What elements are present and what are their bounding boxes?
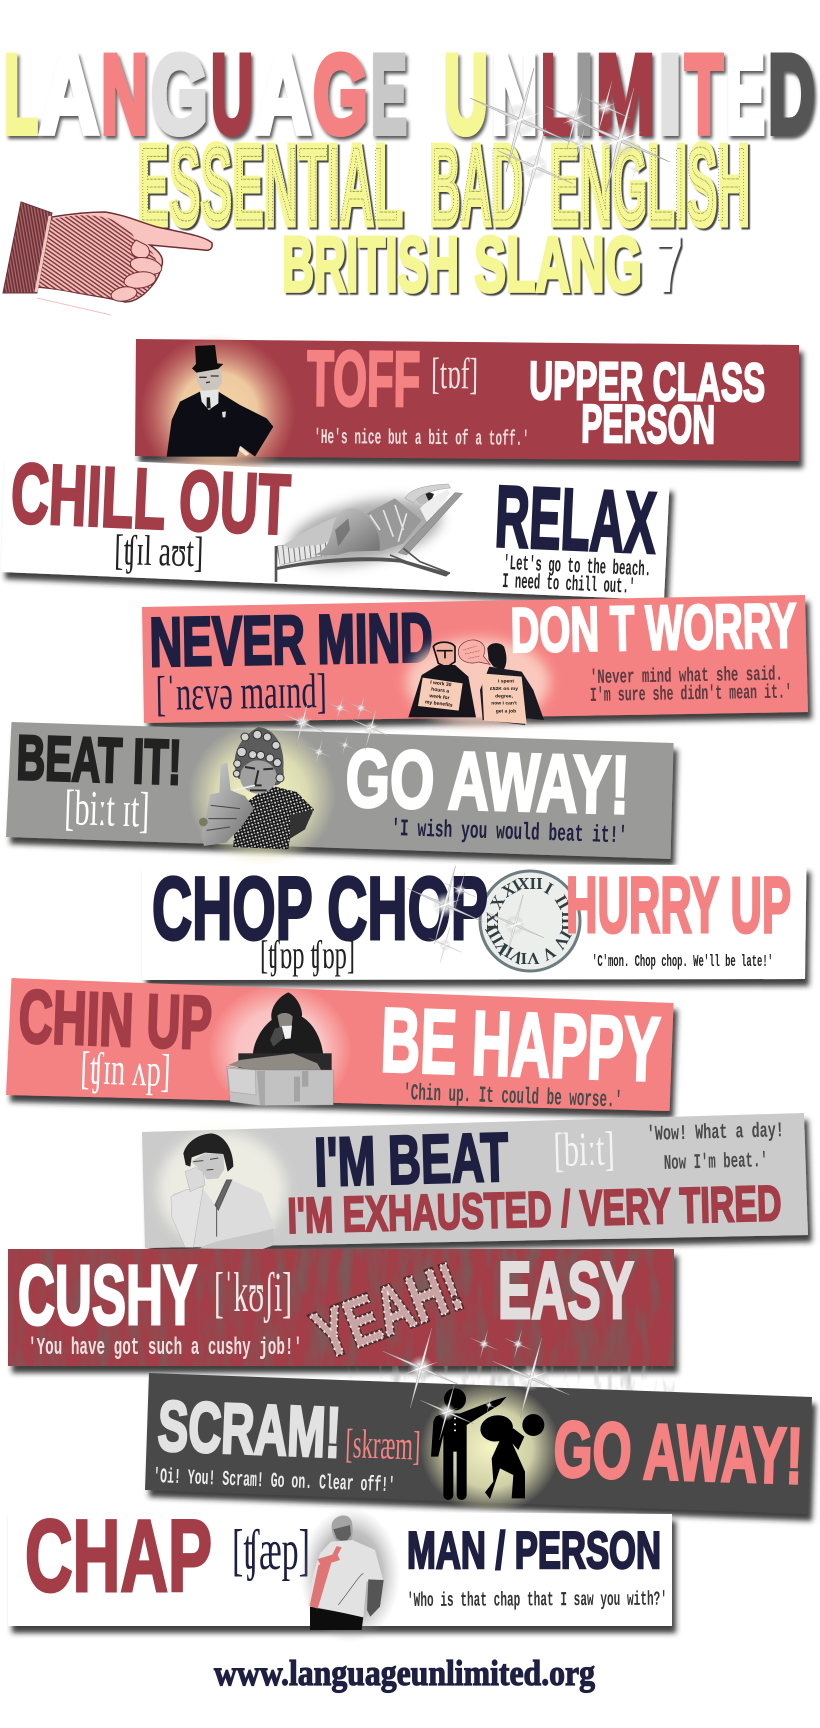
- title: Language Unlimited: A: [39, 32, 99, 157]
- example sentence: [502, 553, 652, 600]
- icon: old clock: II: [551, 892, 574, 913]
- panel: cushy: [8, 1246, 675, 1400]
- photo: woman in curlers: [188, 723, 336, 867]
- phonetics: [ˈkʊʃi]: [214, 1262, 292, 1324]
- banner background: [142, 864, 806, 980]
- banner background: [8, 1510, 672, 1626]
- banner background: [6, 722, 674, 859]
- photo: large man in England shirt: [300, 1507, 400, 1643]
- icon: figure ordering another away: [420, 1382, 560, 1514]
- example sentence: 'Oi! You! Scram! Go on. Clear off!': [153, 1466, 395, 1498]
- example sentence: [647, 1120, 784, 1176]
- panel: i'm beat: [142, 1113, 808, 1249]
- panel: chop chop: [142, 858, 806, 980]
- icon: pointing hand: [3, 202, 212, 315]
- phonetics: [biːt ɪt]: [64, 779, 150, 838]
- subtitle: Essential Bad English: ESSENTIAL: [137, 120, 403, 250]
- photo: man in top hat: [140, 334, 296, 490]
- title: Language Unlimited: N: [491, 32, 538, 157]
- phonetics: [biːt]: [553, 1122, 615, 1177]
- photo: two figures with signs: now I can't: [491, 701, 517, 707]
- icon: old clock: VI: [520, 949, 539, 968]
- meaning: MAN / PERSON: [407, 1522, 661, 1580]
- subtitle: British Slang 7: 7: [656, 220, 682, 308]
- title: Language Unlimited: G: [313, 32, 368, 157]
- example sentence: 'Chin up. It could be worse.': [403, 1080, 623, 1114]
- example sentence: 'Let's go to the beach.: [503, 553, 652, 582]
- meaning: RELAX: [493, 468, 658, 572]
- phonetics: [ˈnɛvə maɪnd]: [155, 663, 327, 721]
- title: Language Unlimited: N: [101, 32, 148, 157]
- panel: chap: [8, 1499, 672, 1643]
- meaning: EASY: [498, 1246, 634, 1336]
- banner background: [142, 595, 808, 723]
- title: Language Unlimited: E: [726, 32, 765, 157]
- photo: two figures with signs: I work 30: [430, 680, 452, 688]
- title: Language Unlimited: I: [658, 32, 682, 157]
- icon: old clock: XI: [498, 875, 525, 901]
- graphic: yeah! sign: [303, 1249, 472, 1374]
- meaning: GO AWAY!: [345, 733, 631, 831]
- subtitle: Essential Bad English: BAD: [429, 120, 523, 250]
- banner background: [8, 1249, 674, 1366]
- title: Language Unlimited: E: [371, 32, 407, 157]
- title: Language Unlimited: G: [151, 32, 208, 157]
- title: Language Unlimited: [4, 32, 815, 157]
- panel: beat it: [6, 722, 674, 867]
- icon: old clock: IV: [549, 927, 575, 953]
- panel: scram: [145, 1373, 812, 1514]
- photo: two figures with signs: [406, 638, 550, 726]
- photo: two figures with signs: degree,: [495, 693, 513, 699]
- example sentence: I need to chill out.': [502, 571, 636, 600]
- word: cushy: CUSHY: [18, 1248, 197, 1342]
- photo: two figures with signs: my benefits: [425, 699, 453, 709]
- icon: old clock: XII: [517, 874, 543, 893]
- meaning: [529, 351, 765, 455]
- subtitle: Essential Bad English: ESSENTIAL: [139, 127, 398, 243]
- phonetics: [skræm]: [345, 1420, 421, 1469]
- website url: www.languageunlimited.org: [214, 1653, 595, 1693]
- photo: two figures with signs: hours a: [431, 687, 450, 695]
- word: scram: SCRAM!: [156, 1387, 342, 1473]
- word: chill out: CHILL OUT: [9, 446, 292, 553]
- photo: hooded man in a box: [208, 984, 352, 1116]
- icon: old clock: VIII: [481, 921, 514, 958]
- example sentence: 'You have got such a cushy job!': [28, 1335, 302, 1362]
- title: Language Unlimited: I: [575, 32, 593, 157]
- word: chop chop: CHOP CHOP: [152, 858, 488, 958]
- icon: old clock: [480, 871, 580, 971]
- title: Language Unlimited: U: [444, 32, 488, 157]
- word: beat it: BEAT IT!: [16, 723, 183, 798]
- title: Language Unlimited: U: [211, 32, 253, 157]
- example sentence: 'I wish you would beat it!': [391, 816, 627, 850]
- icon: old clock: VII: [495, 939, 527, 968]
- photo: two figures with signs: get a job: [496, 709, 516, 715]
- photo: two figures with signs: £52K on my: [490, 686, 518, 692]
- panel: never mind: [142, 591, 808, 726]
- word: toff: TOFF: [307, 334, 421, 423]
- phonetics: [ʧæp]: [232, 1519, 310, 1582]
- title: Language Unlimited: L: [541, 32, 572, 157]
- phonetics: [ʧɪl aʊt]: [114, 527, 204, 576]
- title: Language Unlimited: M: [596, 32, 655, 157]
- photo: two figures with signs: week for: [428, 693, 450, 702]
- word: chin up: CHIN UP: [17, 974, 213, 1065]
- banner background: [145, 1373, 812, 1514]
- word: i'm beat: I'M BEAT: [313, 1119, 509, 1201]
- subtitle: British Slang 7: SLANG: [474, 220, 642, 308]
- example sentence: [590, 664, 792, 708]
- icon: old clock: V: [538, 942, 559, 965]
- banner background: [135, 339, 799, 461]
- subtitle: Essential Bad English: BAD: [431, 127, 521, 243]
- phonetics: [ʧɒp ʧɒp]: [260, 932, 355, 977]
- panel: chill out: [1, 446, 670, 600]
- graphic: yeah! sign: YEAH!: [303, 1249, 472, 1374]
- photo: woman on sun lounger: [275, 484, 463, 582]
- title: Language Unlimited: L: [4, 32, 38, 157]
- panel: toff: [135, 334, 799, 490]
- phonetics: [tɒf]: [431, 349, 478, 398]
- photo: two figures with signs: I spent: [498, 679, 514, 685]
- phonetics: [ʧɪn ʌp]: [80, 1042, 171, 1096]
- title: Language Unlimited: A: [255, 32, 311, 157]
- banner background: [6, 978, 674, 1111]
- word: never mind: NEVER MIND: [149, 599, 433, 681]
- icon: old clock: III: [558, 911, 577, 931]
- icon: old clock: IX: [483, 911, 502, 930]
- word: chap: CHAP: [25, 1499, 212, 1613]
- icon: old clock: X: [486, 892, 509, 912]
- photo: tired young man: [158, 1132, 286, 1249]
- graphic: yeah! sign: YEAH!: [303, 1249, 472, 1374]
- title: Language Unlimited: T: [685, 32, 723, 157]
- panel: chin up: [6, 974, 674, 1116]
- example sentence: 'He's nice but a bit of a toff.': [314, 427, 529, 452]
- meaning: PERSON: [581, 394, 715, 455]
- subtitle: British Slang 7: BRITISH: [282, 220, 459, 308]
- icon: old clock: I: [541, 879, 557, 899]
- banner background: [142, 1113, 808, 1248]
- sparkles: [280, 68, 670, 1440]
- banner background: [1, 456, 670, 600]
